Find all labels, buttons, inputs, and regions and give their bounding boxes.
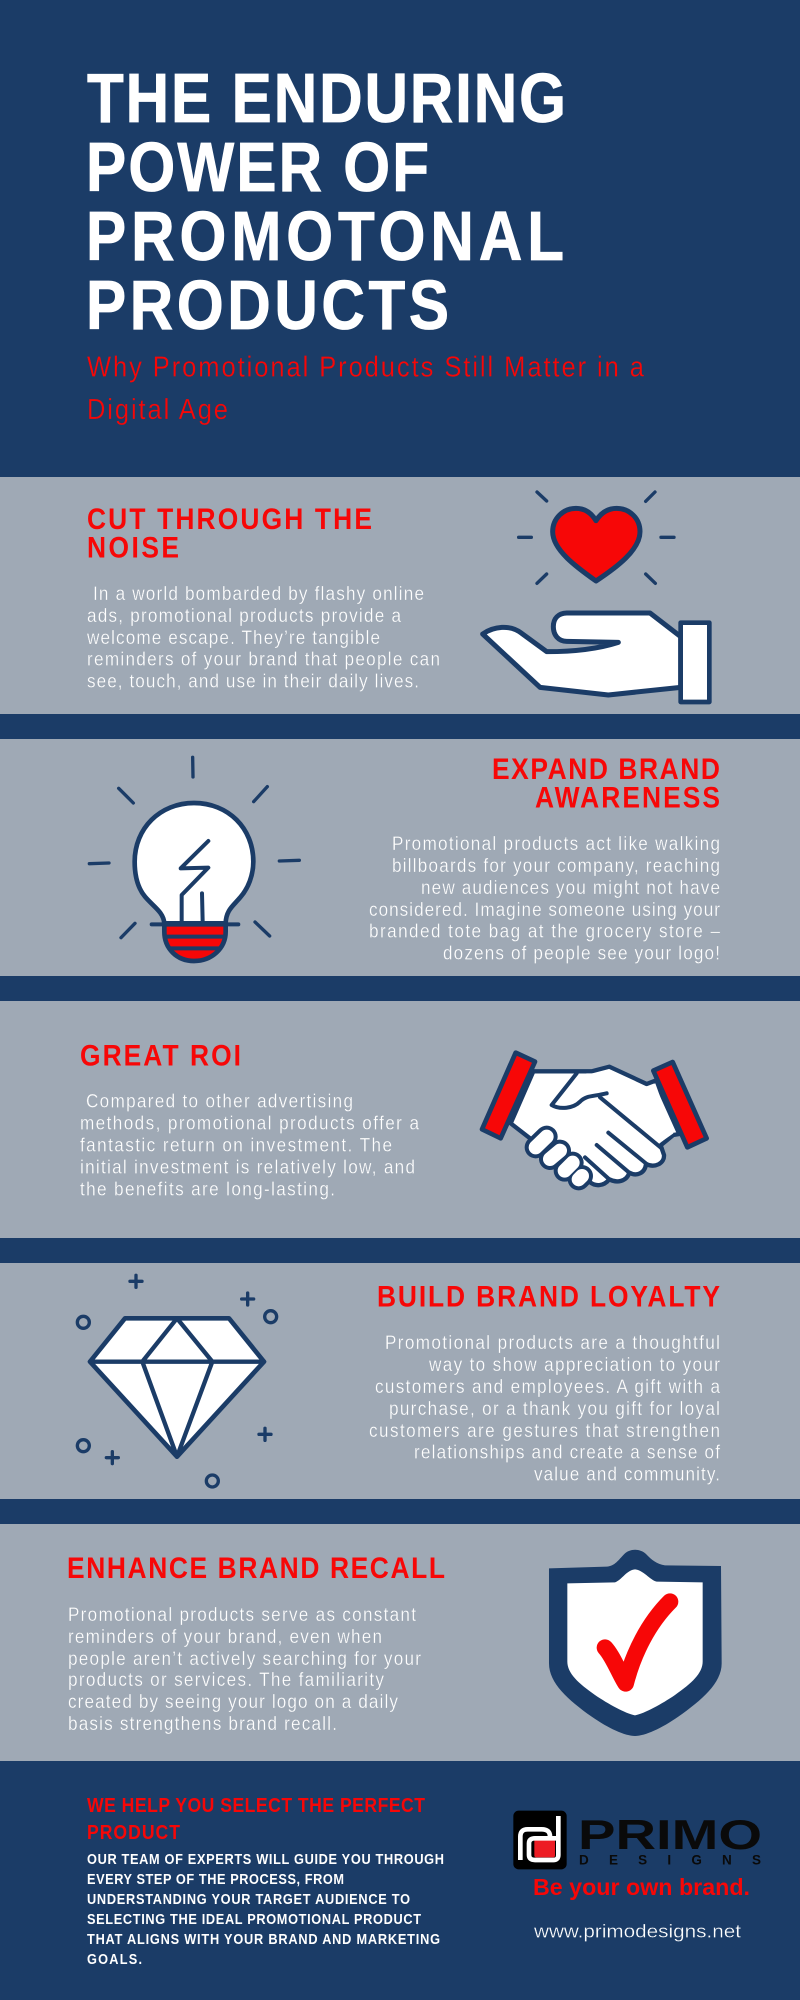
- body text: methods, promotional products offer a: [80, 1111, 420, 1134]
- subtitle: Why Promotional Products Still Matter in a: [87, 350, 645, 383]
- heading: expand brand awareness: AWARENESS: [535, 780, 720, 814]
- panel background: [0, 1524, 800, 1761]
- body text: created by seeing your logo on a daily: [68, 1690, 399, 1712]
- body text: value and community.: [534, 1462, 720, 1485]
- footer text: THAT ALIGNS WITH YOUR BRAND AND MARKETING: [87, 1931, 440, 1947]
- body text: initial investment is relatively low, and: [80, 1155, 415, 1178]
- body text: basis strengthens brand recall.: [68, 1712, 337, 1734]
- footer heading: WE HELP YOU SELECT THE PERFECT: [87, 1794, 425, 1816]
- logo wordmark: PRIMO: [578, 1811, 762, 1858]
- body text: ads, promotional products provide a: [87, 604, 402, 626]
- body text: welcome escape. They’re tangible: [86, 626, 380, 648]
- body text: Promotional products serve as constant: [68, 1603, 416, 1625]
- panel: great roi: [0, 1001, 800, 1238]
- body text: [369, 1331, 721, 1485]
- panel: enhance brand recall: [0, 1524, 800, 1761]
- logo mark: [513, 1811, 567, 1869]
- website url: www.primodesigns.net: [533, 1920, 741, 1942]
- body text: relationships and create a sense of: [414, 1440, 721, 1463]
- body text: fantastic return on investment. The: [80, 1133, 392, 1156]
- body text: [86, 582, 440, 692]
- panel: build brand loyalty: [0, 1263, 800, 1499]
- body text: Promotional products are a thoughtful: [385, 1331, 720, 1353]
- footer text: [87, 1851, 444, 1967]
- title: PRODUCTS: [86, 266, 449, 344]
- heading: enhance brand recall: ENHANCE BRAND RECALL: [67, 1550, 445, 1584]
- body text: reminders of your brand that people can: [87, 647, 440, 670]
- body text: see, touch, and use in their daily lives.: [87, 669, 419, 692]
- footer heading: [87, 1794, 425, 1843]
- heading: cut through the noise: NOISE: [87, 530, 179, 564]
- body text: customers are gestures that strengthen: [369, 1419, 720, 1441]
- icon: shield with check mark: [549, 1550, 722, 1736]
- heading: expand brand awareness: EXPAND BRAND: [492, 751, 720, 785]
- footer text: EVERY STEP OF THE PROCESS, FROM: [87, 1871, 344, 1887]
- body text: branded tote bag at the grocery store –: [369, 919, 721, 942]
- body text: Compared to other advertising: [86, 1089, 353, 1112]
- icon: light bulb: [89, 757, 299, 961]
- body text: Promotional products act like walking: [392, 832, 720, 854]
- body text: billboards for your company, reaching: [392, 854, 720, 876]
- body text: reminders of your brand, even when: [68, 1625, 382, 1647]
- icon: handshake: [482, 1053, 707, 1185]
- footer text: SELECTING THE IDEAL PROMOTIONAL PRODUCT: [87, 1911, 422, 1927]
- body text: dozens of people see your logo!: [443, 941, 720, 964]
- body text: considered. Imagine someone using your: [369, 898, 720, 920]
- body text: [68, 1603, 421, 1734]
- title: THE ENDURING: [87, 59, 566, 137]
- body text: new audiences you might not have: [421, 876, 720, 898]
- tagline: Be your own brand.: [533, 1874, 750, 1900]
- footer text: GOALS.: [87, 1951, 142, 1967]
- footer text: OUR TEAM OF EXPERTS WILL GUIDE YOU THROUGH: [87, 1851, 444, 1867]
- heading: great roi: GREAT ROI: [80, 1038, 241, 1072]
- title: PROMOTONAL: [86, 197, 564, 275]
- body text: In a world bombarded by flashy online: [93, 582, 424, 604]
- icon: heart in hand: [483, 492, 709, 702]
- logo sub-wordmark: DESIGNS: [579, 1852, 761, 1868]
- subtitle: Digital Age: [87, 392, 228, 425]
- body text: people aren’t actively searching for your: [68, 1647, 421, 1669]
- body text: way to show appreciation to your: [428, 1353, 720, 1375]
- icon: diamond: [77, 1275, 277, 1487]
- body text: customers and employees. A gift with a: [375, 1375, 721, 1397]
- body text: the benefits are long-lasting.: [80, 1177, 335, 1200]
- title: POWER OF: [86, 128, 429, 206]
- body text: [369, 832, 721, 964]
- body text: purchase, or a thank you gift for loyal: [389, 1397, 720, 1419]
- heading: cut through the noise: CUT THROUGH THE: [87, 501, 372, 535]
- footer call to action: [87, 1794, 444, 1967]
- title: [86, 59, 566, 344]
- heading: cut through the noise: [87, 501, 372, 564]
- panel background: [0, 1263, 800, 1499]
- panel: cut through the noise: [0, 477, 800, 714]
- panel background: [0, 477, 800, 714]
- footer heading: PRODUCT: [87, 1821, 180, 1843]
- footer text: UNDERSTANDING YOUR TARGET AUDIENCE TO: [87, 1891, 410, 1907]
- subtitle: [87, 350, 645, 425]
- panel background: [0, 1001, 800, 1238]
- heading: build brand loyalty: BUILD BRAND LOYALTY: [377, 1279, 720, 1313]
- panel background: [0, 739, 800, 976]
- logo: primo designs: [513, 1811, 762, 1869]
- body text: [80, 1089, 420, 1200]
- panel: expand brand awareness: [0, 739, 800, 976]
- body text: products or services. The familiarity: [68, 1668, 385, 1690]
- heading: expand brand awareness: [492, 751, 720, 814]
